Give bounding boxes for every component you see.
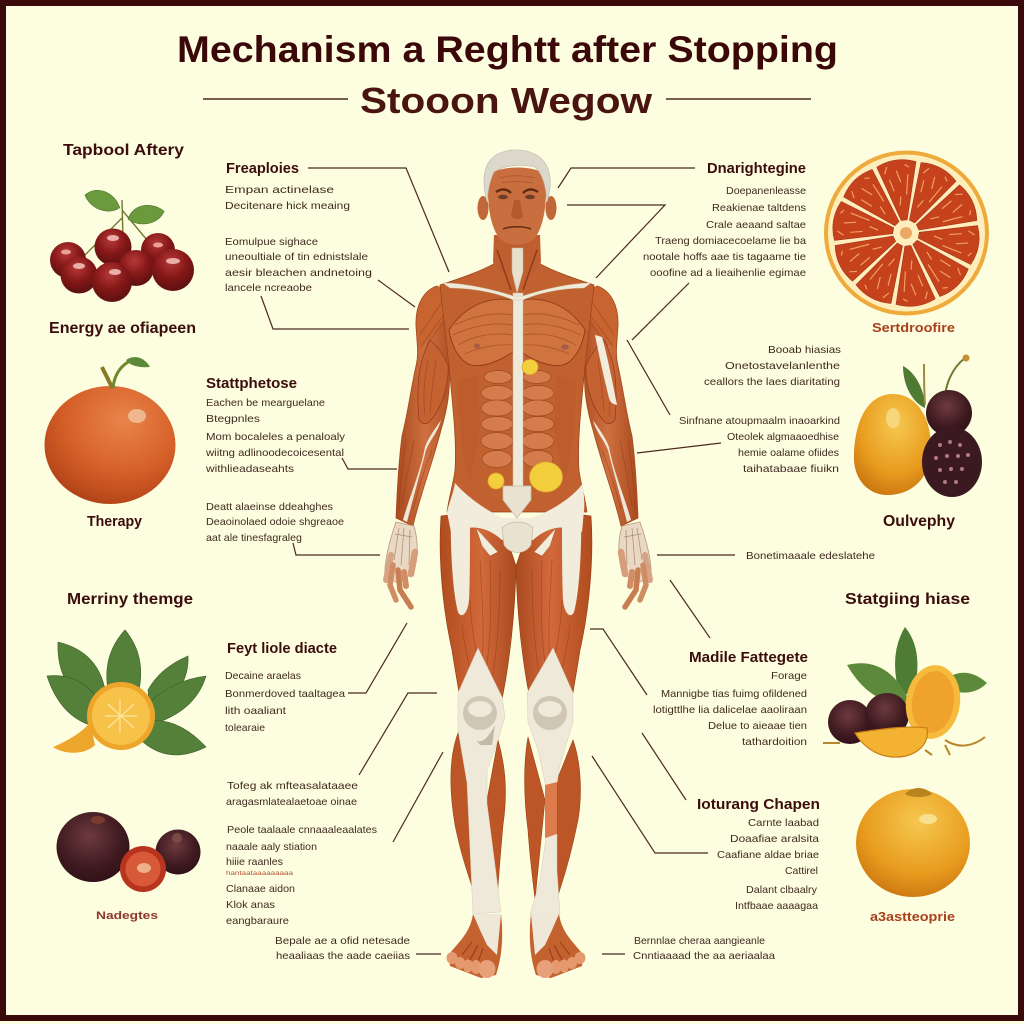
text block: left middle note: Deatt alaeinse ddeahghes: [206, 501, 333, 513]
fruit label: top left: Tapbool Aftery: [63, 142, 184, 159]
text block: lower left note: eangbaraure: [226, 915, 289, 927]
text block: stattphetose: withlieadaseahts: [205, 463, 294, 475]
text block: madile fattegete: Madile Fattegete: [689, 650, 808, 666]
text block: right foot note: [633, 935, 775, 962]
text block: left upper note: Eomulpue sighace: [225, 236, 318, 248]
right arm white band: [595, 335, 617, 405]
text block: ioturang chapen: Ioturang Chapen: [697, 797, 820, 813]
text block: dnarightegine: ooofine ad a lieaihenlie egimae: [650, 267, 806, 279]
text block: stattphetose: Btegpnles: [206, 413, 260, 425]
neck: [493, 235, 541, 293]
caption: grapefruit: Sertdroofire: [872, 321, 955, 335]
text block: dnarightegine: Traeng domiacecoelame lie ba: [655, 235, 806, 247]
text block: lower left note: Tofeg ak mfteasalataaee: [227, 780, 358, 792]
text block: ioturang chapen: [697, 797, 820, 912]
caption: therapy: Therapy: [87, 514, 142, 530]
text block: left middle note: aat ale tinesfagraleg: [206, 532, 302, 544]
text block: dnarightegine: Reakienae taltdens: [712, 202, 806, 214]
text block: feyt liole diacte: Feyt liole diacte: [227, 641, 337, 657]
icon: mango and plums: [854, 354, 982, 497]
linea alba: [513, 293, 523, 487]
anatomical figure: [385, 150, 651, 978]
connector lines: [261, 168, 735, 954]
caption: cherries: Energy ae ofiapeen: [49, 320, 196, 337]
text block: madile fattegete: lotigttlhe lia dalicelae aaoliraan: [653, 704, 807, 716]
text block: stattphetose: [205, 376, 346, 475]
text block: right upper note: [704, 344, 841, 388]
right arm: [572, 286, 638, 526]
text block: madile fattegete: tathardoition: [742, 736, 807, 748]
text block: dnarightegine: Doepanenleasse: [726, 185, 806, 197]
right knee and shin: [525, 648, 580, 915]
text block: stattphetose: Stattphetose: [206, 376, 297, 392]
text block: dnarightegine: Dnarightegine: [707, 161, 806, 177]
fruit label: lower left: Merriny themge: [67, 591, 193, 608]
title: Mechanism a Reghtt after Stopping: [177, 29, 838, 70]
text block: right middle note: Sinfnane atoupmaalm inaoarkind: [679, 415, 840, 427]
text block: lower left note: Clanaae aidon: [226, 883, 295, 895]
text: right hand note: Bonetimaaale edeslatehe: [746, 550, 875, 562]
text block: feyt liole diacte: Decaine araelas: [225, 670, 301, 682]
text block: dnarightegine: Crale aeaand saltae: [706, 219, 806, 231]
text block: feyt liole diacte: Bonmerdoved taaltagea: [225, 688, 345, 700]
right hand: [619, 522, 651, 607]
text block: ioturang chapen: Carnte laabad: [748, 817, 819, 829]
icon: plums and tomato: [56, 812, 200, 892]
text block: freaploies: Empan actinelase: [225, 184, 334, 196]
text block: right upper note: ceallors the laes diaritating: [704, 376, 840, 388]
text block: right foot note: Bernnlae cheraa aangieanle: [634, 935, 765, 947]
clavicles: [443, 283, 591, 300]
text block: feyt liole diacte: [225, 641, 345, 734]
left hand: [385, 522, 417, 607]
abdominal muscles: [481, 370, 554, 468]
icon: grapefruit slice: [820, 150, 992, 316]
text block: right middle note: hemie oalame ofiides: [738, 447, 839, 459]
text block: madile fattegete: [653, 650, 808, 748]
text block: feyt liole diacte: lith oaaliant: [225, 705, 286, 717]
fruit label: lower right: Statgiing hiase: [845, 591, 970, 608]
left knee and shin: [451, 648, 505, 914]
head: [478, 150, 556, 245]
text block: stattphetose: wiitng adlinoodecoicesental: [205, 447, 344, 459]
pelvic white band: [447, 483, 584, 540]
text block: left foot note: heaaliaas the aade caeiias: [276, 950, 410, 962]
text block: right middle note: Oteolek algmaaoedhise: [727, 431, 839, 443]
thighs: [440, 508, 592, 699]
icon: orange slice and leaves: [47, 630, 206, 755]
text block: right upper note: Onetostavelanlenthe: [725, 360, 840, 372]
caption: golden orange: a3astteoprie: [870, 910, 955, 924]
text block: lower left note: aragasmlatealaetoae oinae: [226, 796, 357, 808]
text block: lower left note: naaale aaly stiation: [226, 841, 317, 853]
caption: mango: Oulvephy: [883, 513, 955, 530]
text block: right middle note: [679, 415, 840, 475]
yellow fat deposits: [488, 360, 562, 492]
icon: orange fruit: [44, 357, 176, 504]
text block: madile fattegete: Forage: [771, 670, 807, 682]
text block: lower left note: hiiie raanles: [226, 856, 283, 868]
text block: left middle note: Deaoinolaed odoie shgreaoe: [206, 516, 344, 528]
text block: stattphetose: Eachen be mearguelane: [206, 397, 325, 409]
text block: ioturang chapen: Doaafiae aralsita: [730, 833, 819, 845]
text block: freaploies: [225, 161, 350, 212]
text block: madile fattegete: Mannigbe tias fuimg ofildened: [661, 688, 807, 700]
icon: cherries: [50, 186, 194, 302]
text block: feyt liole diacte: tolearaie: [225, 722, 265, 734]
icon: plums with citrus: [823, 627, 987, 757]
subtitle with side rules: Stooon Wegow: [360, 80, 653, 121]
text block: freaploies: Freaploies: [226, 161, 299, 177]
caption: plums: Nadegtes: [96, 910, 158, 922]
text block: lower left note: Klok anas: [226, 899, 275, 911]
left arm: [396, 286, 462, 526]
feet: [446, 914, 586, 978]
pectoral muscles: [449, 299, 513, 366]
text block: left foot note: Bepale ae a ofid netesade: [275, 935, 410, 947]
text block: left middle note: [206, 501, 344, 544]
text block: dnarightegine: nootale hoffs aae tis tagaame tie: [643, 251, 806, 263]
text block: right foot note: Cnntiaaaad the aa aeriaalaa: [633, 950, 775, 962]
obliques: [458, 375, 576, 480]
text block: lower left note: hantaataaaaaaaaa: [226, 870, 293, 877]
text block: left foot note: [275, 935, 410, 962]
text block: left upper note: lancele ncreaobe: [225, 282, 312, 294]
icon: golden orange: [856, 788, 970, 897]
text block: left upper note: aesir bleachen andnetoing: [225, 267, 372, 279]
text block: dnarightegine: [643, 161, 806, 279]
text block: left upper note: [225, 236, 372, 294]
text block: ioturang chapen: Intfbaae aaaagaa: [735, 900, 818, 912]
central pelvic shapes: [503, 486, 531, 518]
text block: right upper note: Booab hiasias: [768, 344, 841, 356]
text block: freaploies: Decitenare hick meaing: [225, 200, 350, 212]
text block: lower left note: [226, 780, 377, 927]
text block: stattphetose: Mom bocaleles a penaloaly: [206, 431, 346, 443]
text block: ioturang chapen: Caafiane aldae briae: [717, 849, 819, 861]
text block: lower left note: Peole taalaale cnnaaaleaalates: [227, 824, 377, 836]
text block: ioturang chapen: Cattirel: [785, 865, 818, 877]
text block: left upper note: uneoultiale of tin ednistslale: [225, 251, 368, 263]
text block: right middle note: taihatabaae fiuikn: [743, 463, 839, 475]
torso: [440, 252, 594, 552]
text block: madile fattegete: Delue to aieaae tien: [708, 720, 807, 732]
text block: ioturang chapen: Dalant clbaalry: [746, 884, 818, 896]
